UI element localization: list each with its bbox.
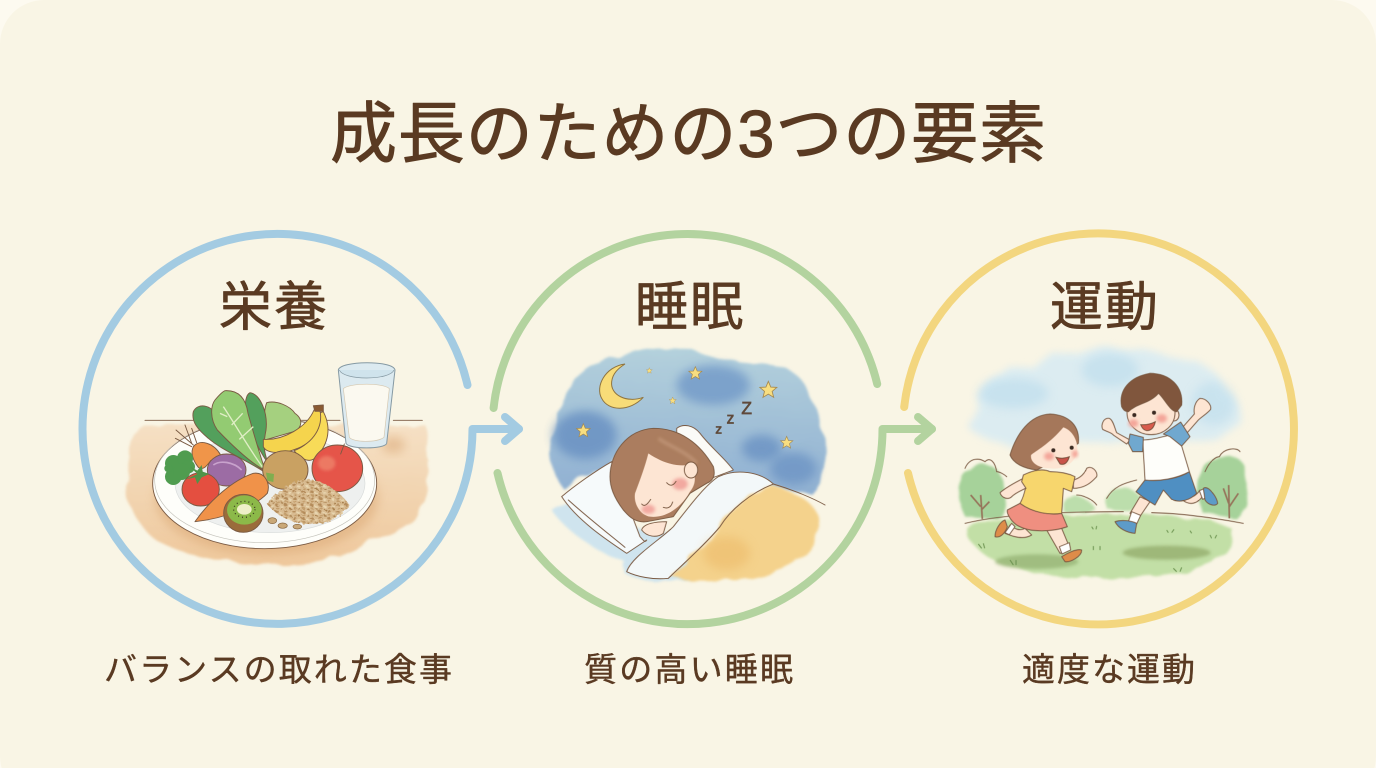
hand <box>642 522 667 536</box>
heading: nutrition: 栄養 <box>219 278 327 337</box>
potato <box>263 451 308 489</box>
plate <box>153 417 377 549</box>
yellow blanket <box>668 484 825 582</box>
caption: nutrition: バランスの取れた食事 <box>104 651 452 688</box>
arrowhead <box>505 417 519 441</box>
caption: exercise: 適度な運動 <box>1022 651 1195 688</box>
panel: sleep <box>494 234 932 688</box>
carrot <box>195 473 274 522</box>
kiwi <box>224 494 263 532</box>
bedding wash <box>552 500 700 582</box>
heading: exercise: 運動 <box>1050 278 1158 337</box>
crescent moon <box>600 364 643 408</box>
glass of milk <box>338 363 395 448</box>
night sky wash <box>550 347 826 493</box>
yellow ring <box>904 233 1294 624</box>
heading: sleep: 睡眠 <box>635 278 743 337</box>
panel: exercise <box>904 233 1294 688</box>
blue ring with arrow <box>83 234 519 624</box>
apple <box>312 444 363 492</box>
caption: sleep: 質の高い睡眠 <box>584 651 793 688</box>
sleep letters: Z <box>741 398 752 418</box>
sleep letters: z <box>727 410 734 427</box>
table wash <box>126 425 428 565</box>
front pillow <box>562 462 647 553</box>
green ring with arrow <box>494 234 932 624</box>
trees and bushes <box>960 449 1248 519</box>
title: 成長のための3つの要素 <box>330 97 1046 172</box>
illustration: children running in park <box>960 349 1248 579</box>
boy jumping <box>1102 373 1218 533</box>
illustration: child sleeping under night sky <box>550 347 826 582</box>
bananas <box>263 405 328 460</box>
leafy greens <box>193 391 301 472</box>
white sheet <box>627 472 773 579</box>
small carrot with greens <box>175 425 221 468</box>
whole grains <box>267 479 349 529</box>
tomato <box>182 465 219 506</box>
stars <box>576 367 793 448</box>
child head <box>610 428 714 522</box>
broccoli <box>164 450 195 485</box>
grass meadow <box>965 512 1243 579</box>
red onion <box>207 454 246 486</box>
back pillow <box>677 426 733 480</box>
sleep letters: z <box>715 421 722 436</box>
sky wash <box>968 349 1241 445</box>
panel: nutrition <box>83 234 519 688</box>
girl running <box>995 414 1097 562</box>
sleep letters <box>715 398 752 436</box>
arrowhead <box>918 417 932 441</box>
illustration: plate of food and glass of milk <box>126 363 428 565</box>
